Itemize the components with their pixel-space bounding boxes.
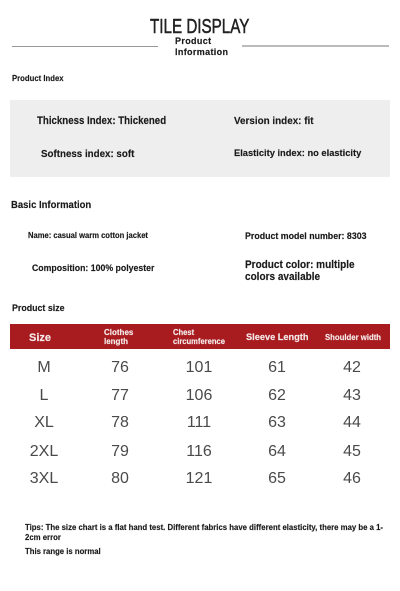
heading: product size: Product size	[12, 302, 65, 314]
row: L: L	[40, 387, 48, 404]
version index: Version index: fit	[234, 115, 314, 127]
row: M: 101	[186, 359, 212, 376]
table header	[10, 324, 390, 349]
row: M: 42	[343, 359, 361, 376]
subtitle: Product Information	[175, 36, 228, 57]
product name: Name: casual warm cotton jacket	[28, 230, 148, 240]
row: 3XL	[30, 470, 361, 487]
tips text	[24, 522, 383, 542]
row: XL: 78	[111, 414, 129, 431]
header: shoulder width: Shoulder width	[325, 332, 381, 342]
size table	[10, 324, 390, 487]
row: M: M	[37, 359, 51, 376]
header: size: Size	[29, 332, 51, 344]
row: L: 43	[343, 387, 361, 404]
row: XL	[34, 414, 361, 431]
row: 3XL: 80	[111, 470, 129, 487]
row: L: 62	[268, 387, 286, 404]
thickness index: Thickness Index: Thickened	[37, 115, 166, 127]
row: 2XL: 79	[111, 443, 129, 460]
header: sleeve length: Sleeve Length	[246, 332, 308, 342]
tips text: Tips: The size chart is a flat hand test. Different fabrics have different elasticity, there may be a 1-	[24, 522, 383, 532]
elasticity index: Elasticity index: no elasticity	[234, 148, 361, 159]
row: M: 61	[268, 359, 286, 376]
row: 2XL	[30, 443, 361, 460]
title: TILE DISPLAY	[150, 16, 249, 38]
softness index: Softness index: soft	[41, 148, 134, 160]
row: 3XL: 65	[268, 470, 286, 487]
header: clothes length: Clothes length	[104, 328, 133, 346]
row: XL: 44	[343, 414, 361, 431]
right divider line	[242, 45, 389, 47]
left divider line	[12, 46, 158, 47]
header: chest circumference: Chest circumference	[173, 328, 225, 346]
row: 2XL: 116	[186, 443, 212, 460]
product model number: Product model number: 8303	[245, 230, 367, 240]
tips text: 2cm error	[24, 532, 60, 542]
panel: product index	[10, 100, 390, 177]
row: M	[37, 359, 361, 376]
row: 3XL: 46	[343, 470, 361, 487]
row: 2XL: 45	[343, 443, 361, 460]
row: XL: 63	[268, 414, 286, 431]
row: 3XL: 3XL	[30, 470, 58, 487]
heading: basic information: Basic Information	[11, 200, 91, 210]
heading: product index: Product Index	[12, 73, 64, 83]
row: M: 76	[111, 359, 129, 376]
row: L: 106	[186, 387, 212, 404]
row: 2XL: 2XL	[30, 443, 58, 460]
product color: Product color: multiple colors available	[245, 258, 355, 282]
row: XL: 111	[187, 414, 211, 431]
composition: Composition: 100% polyester	[32, 262, 154, 274]
row: 3XL: 121	[186, 470, 212, 487]
row: L	[40, 387, 361, 404]
row: XL: XL	[34, 414, 54, 431]
range note: This range is normal	[24, 546, 100, 556]
row: 2XL: 64	[268, 443, 286, 460]
row: L: 77	[111, 387, 129, 404]
